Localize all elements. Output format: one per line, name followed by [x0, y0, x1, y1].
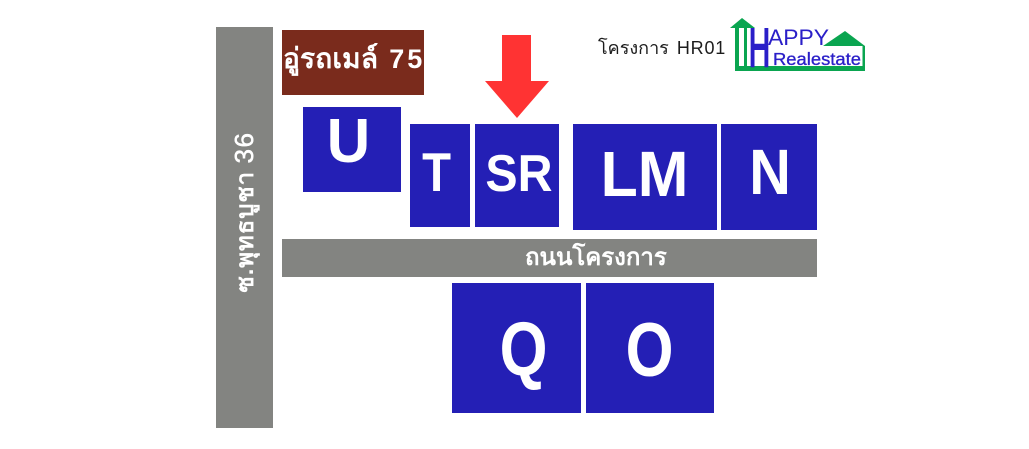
landmark: Auto Mall 75: [282, 30, 424, 95]
side road label: ซ.พุทธบูชา 36: [229, 132, 259, 292]
plot SR: SR: [485, 144, 553, 202]
project road: ถนนโครงการ: [525, 244, 667, 271]
project road: [282, 239, 817, 277]
plot U: [303, 107, 401, 192]
plot Q: Q: [500, 306, 547, 391]
logo: Happy Realestate: APPY: [768, 25, 829, 50]
plot N: N: [749, 136, 791, 208]
project label: โครงการ HR01: [598, 38, 726, 58]
plot SR: [475, 124, 559, 227]
side road: soi Phutthabucha 36: [216, 27, 273, 428]
plot Q: [452, 283, 581, 413]
plot O: [586, 283, 714, 413]
plot T: T: [422, 142, 451, 203]
logo: Happy Realestate: Realestate: [773, 49, 861, 69]
plot LM: [573, 124, 717, 230]
plot U: U: [327, 106, 370, 175]
plot N: [721, 124, 817, 230]
plot LM: LM: [601, 139, 688, 210]
landmark: Auto Mall 75: อู่รถเมล์ 75: [283, 43, 425, 74]
plot T: [410, 124, 470, 227]
red location arrow: [485, 35, 549, 118]
plot O: O: [626, 307, 673, 392]
logo: Happy Realestate: [730, 18, 865, 74]
